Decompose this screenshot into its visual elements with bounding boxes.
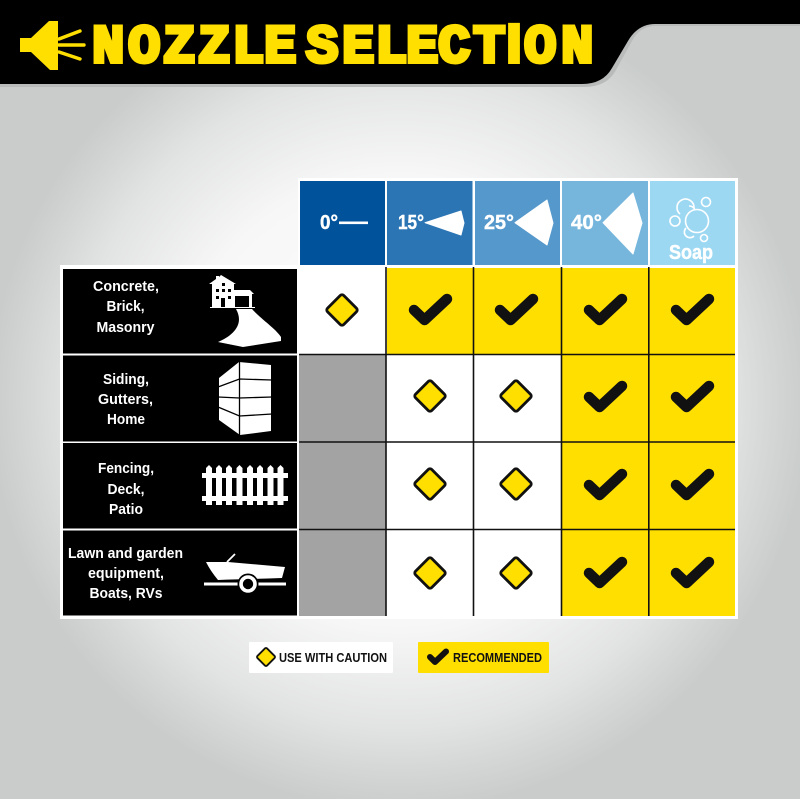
icon: caution diamond xyxy=(414,468,446,500)
icon: check mark xyxy=(676,299,709,320)
column header: 0 degrees xyxy=(300,181,385,265)
icon: check mark xyxy=(676,474,709,495)
column header: 15 degrees: 15° xyxy=(398,212,424,234)
column header: 40 degrees xyxy=(562,181,648,265)
icon: check mark xyxy=(589,562,622,583)
table cells xyxy=(299,267,735,616)
legend: use with caution: USE WITH CAUTION xyxy=(279,651,387,665)
icon: caution diamond xyxy=(500,380,532,412)
caution marks xyxy=(326,294,532,589)
row label: concrete: Brick, xyxy=(106,299,144,315)
icon: check mark xyxy=(414,299,447,320)
legend: recommended: RECOMMENDED xyxy=(453,651,542,665)
icon: check mark xyxy=(589,299,622,320)
icon: boat on trailer xyxy=(204,554,286,594)
icon: caution diamond xyxy=(500,468,532,500)
column header: soap: Soap xyxy=(669,242,713,264)
row label: fencing xyxy=(63,443,297,528)
row label: fencing: Deck, xyxy=(108,482,144,498)
row label: lawn and garden: Boats, RVs xyxy=(90,586,162,602)
legend: recommended xyxy=(418,642,549,673)
column header: 0 degrees: 0° xyxy=(320,212,338,234)
column header: soap xyxy=(650,181,735,265)
row label: lawn and garden: equipment, xyxy=(88,566,164,582)
column header: 15 degrees xyxy=(387,181,472,265)
icon: soap bubbles xyxy=(670,198,710,242)
column header: 25 degrees xyxy=(475,181,560,265)
column header: 25 degrees: 25° xyxy=(484,212,514,234)
icon: house and driveway xyxy=(209,275,281,347)
icon: check mark xyxy=(676,386,709,407)
row label: concrete: Masonry xyxy=(96,320,154,336)
title: NOZZLE SELECTION xyxy=(92,14,593,79)
row label: fencing: Patio xyxy=(109,502,143,518)
legend: use with caution xyxy=(249,642,393,673)
icon: caution diamond xyxy=(326,294,358,326)
column header: 40 degrees: 40° xyxy=(571,212,602,234)
icon: caution diamond xyxy=(414,380,446,412)
row label: lawn and garden xyxy=(63,530,297,616)
recommended marks xyxy=(414,299,709,583)
row label: siding: Home xyxy=(107,412,145,428)
icon: caution diamond xyxy=(414,557,446,589)
row label: concrete xyxy=(63,269,297,354)
icon: check mark xyxy=(589,386,622,407)
icon: check mark xyxy=(500,299,533,320)
chart panel: white backing xyxy=(60,178,738,619)
row label: fencing: Fencing, xyxy=(98,461,154,477)
row label: lawn and garden: Lawn and garden xyxy=(68,546,183,562)
row label: siding: Siding, xyxy=(103,372,149,388)
row label: concrete: Concrete, xyxy=(93,279,159,295)
icon: check mark xyxy=(589,474,622,495)
icon: house siding xyxy=(218,361,272,436)
icon: nozzle spray xyxy=(20,21,84,70)
icon: check mark xyxy=(676,562,709,583)
icon: caution diamond xyxy=(500,557,532,589)
row label: siding xyxy=(63,356,297,442)
row label: siding: Gutters, xyxy=(98,392,153,408)
header banner xyxy=(0,0,800,87)
icon: picket fence xyxy=(202,465,288,505)
